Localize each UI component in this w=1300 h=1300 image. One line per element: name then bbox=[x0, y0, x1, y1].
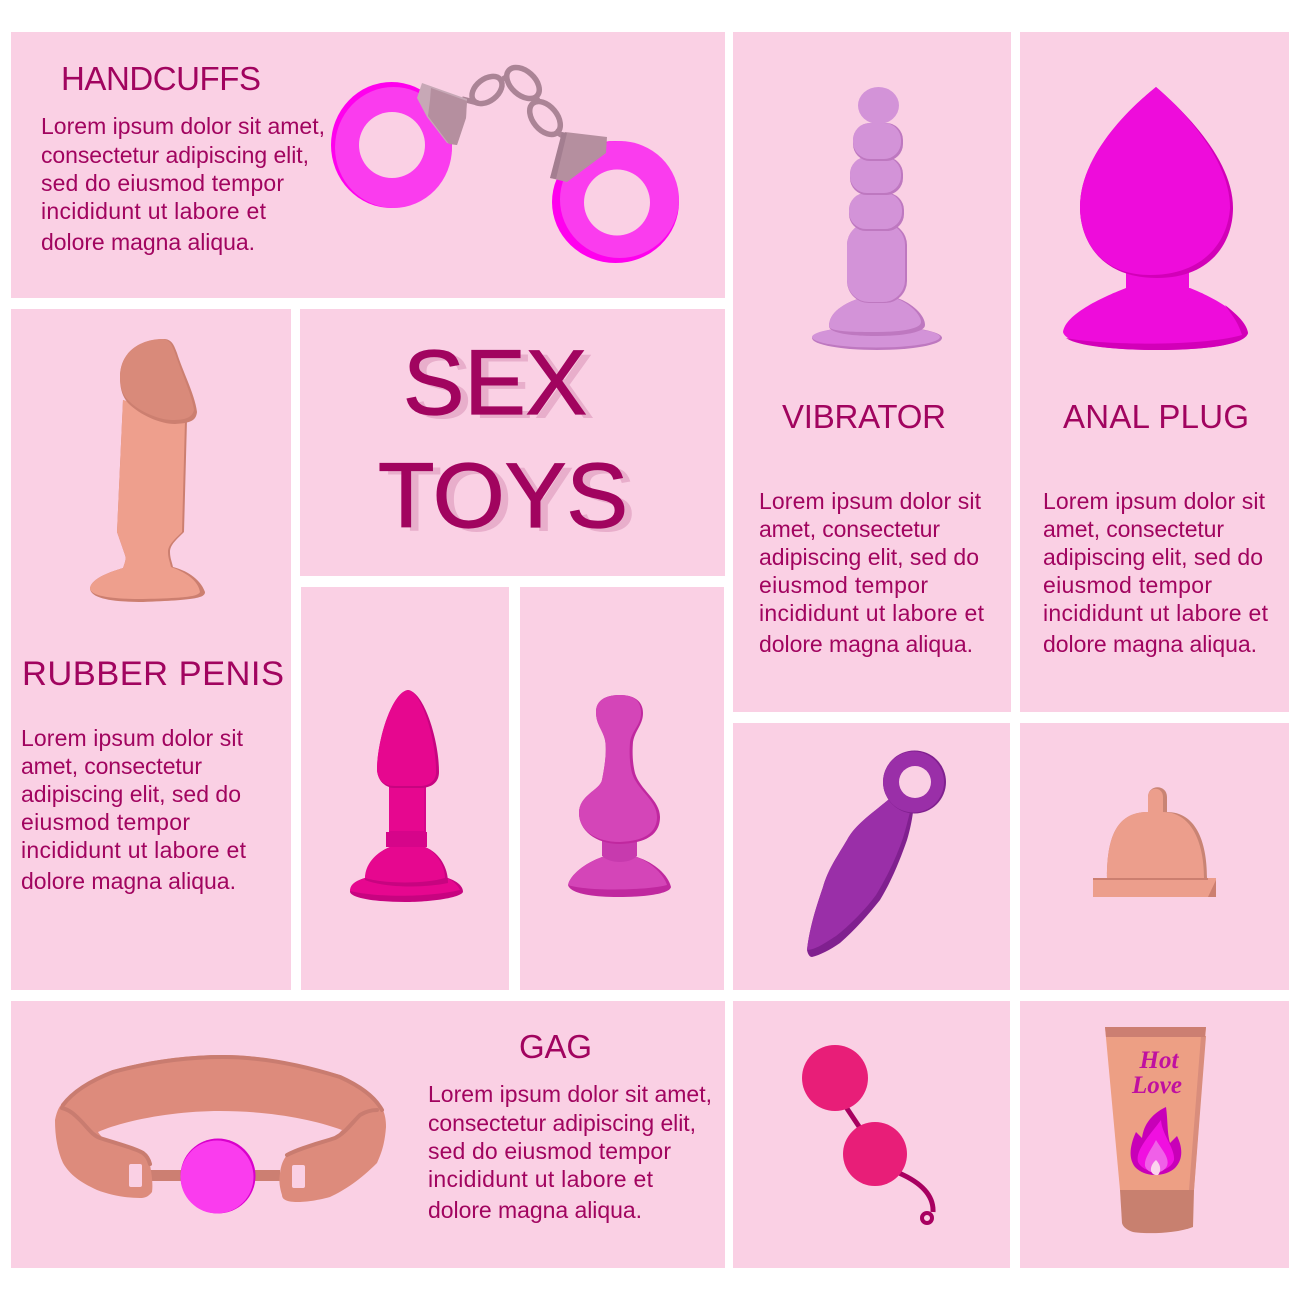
text block: gag: Lorem ipsum dolor sit amet, bbox=[428, 1081, 712, 1107]
panel: vibrator bbox=[733, 32, 1011, 712]
panel: gag bbox=[11, 1001, 725, 1268]
panel: bulb plug bbox=[520, 587, 724, 990]
text block: handcuffs: dolore magna aliqua. bbox=[41, 229, 255, 255]
panel: rubber penis bbox=[11, 309, 291, 990]
text block: gag: incididunt ut labore et bbox=[428, 1166, 654, 1192]
text block: vibrator: incididunt ut labore et bbox=[759, 600, 985, 626]
text block: anal plug: incididunt ut labore et bbox=[1043, 600, 1269, 626]
title: SEX bbox=[403, 332, 587, 434]
panel: anal plug bbox=[1020, 32, 1289, 712]
text block: vibrator bbox=[759, 488, 985, 657]
text block: rubber penis: adipiscing elit, sed do bbox=[21, 781, 241, 807]
panel: balls bbox=[733, 1001, 1010, 1268]
text block: vibrator: amet, consectetur bbox=[759, 516, 940, 542]
text block: rubber penis: amet, consectetur bbox=[21, 753, 202, 779]
heading: vibrator: VIBRATOR bbox=[782, 398, 946, 435]
text block: gag bbox=[428, 1081, 712, 1223]
icon: handcuffs bbox=[331, 61, 679, 263]
tube label: Love bbox=[1131, 1072, 1182, 1099]
text block: rubber penis: eiusmod tempor bbox=[21, 809, 190, 835]
panel: pink plug bbox=[301, 587, 509, 990]
text block: handcuffs: consectetur adipiscing elit, bbox=[41, 142, 309, 168]
heading: gag: GAG bbox=[519, 1028, 592, 1065]
heading: anal plug: ANAL PLUG bbox=[1063, 398, 1249, 435]
text block: anal plug bbox=[1043, 488, 1269, 657]
title: TOYS bbox=[378, 445, 628, 547]
heading: handcuffs: HANDCUFFS bbox=[61, 60, 261, 97]
panel: handcuffs bbox=[11, 32, 725, 298]
title: SEX bbox=[411, 336, 595, 438]
icon: ring toy bbox=[807, 750, 946, 957]
icon: ball gag bbox=[55, 1055, 386, 1214]
icon: cup bbox=[1093, 787, 1216, 897]
panel: title bbox=[300, 309, 725, 576]
heading: rubber penis: RUBBER PENIS bbox=[22, 655, 284, 693]
text block: anal plug: amet, consectetur bbox=[1043, 516, 1224, 542]
panel: cup bbox=[1020, 723, 1289, 990]
text block: anal plug: adipiscing elit, sed do bbox=[1043, 544, 1263, 570]
text block: rubber penis: dolore magna aliqua. bbox=[21, 868, 236, 894]
panel: ring toy bbox=[733, 723, 1010, 990]
text block: anal plug: dolore magna aliqua. bbox=[1043, 631, 1257, 657]
icon: bulb plug bbox=[568, 695, 671, 897]
text block: anal plug: Lorem ipsum dolor sit bbox=[1043, 488, 1266, 514]
icon: rubber toy bbox=[90, 339, 205, 602]
text block: handcuffs: sed do eiusmod tempor bbox=[41, 170, 284, 196]
panel: lubricant bbox=[1020, 1001, 1289, 1268]
text block: gag: consectetur adipiscing elit, bbox=[428, 1110, 696, 1136]
text block: rubber penis: incididunt ut labore et bbox=[21, 837, 247, 863]
text block: gag: dolore magna aliqua. bbox=[428, 1197, 642, 1223]
icon: love balls bbox=[802, 1045, 933, 1223]
icon: lubricant tube bbox=[1105, 1027, 1206, 1233]
text block: vibrator: dolore magna aliqua. bbox=[759, 631, 973, 657]
text block: handcuffs: Lorem ipsum dolor sit amet, bbox=[41, 113, 325, 139]
tube label bbox=[1131, 1047, 1182, 1099]
text block: vibrator: eiusmod tempor bbox=[759, 572, 928, 598]
icon: flame bbox=[1131, 1107, 1181, 1175]
text block: rubber penis bbox=[21, 725, 247, 894]
text block: vibrator: Lorem ipsum dolor sit bbox=[759, 488, 982, 514]
text block: anal plug: eiusmod tempor bbox=[1043, 572, 1212, 598]
icon: beaded vibrator bbox=[812, 87, 942, 350]
text block: rubber penis: Lorem ipsum dolor sit bbox=[21, 725, 244, 751]
text block: handcuffs: incididunt ut labore et bbox=[41, 198, 267, 224]
tube label: Hot bbox=[1139, 1047, 1179, 1074]
text block: vibrator: adipiscing elit, sed do bbox=[759, 544, 979, 570]
text block: gag: sed do eiusmod tempor bbox=[428, 1138, 671, 1164]
icon: anal plug bbox=[1063, 87, 1248, 350]
text block: handcuffs bbox=[41, 113, 325, 255]
title: TOYS bbox=[386, 449, 636, 551]
icon: pink plug bbox=[350, 690, 463, 902]
title bbox=[378, 332, 636, 551]
